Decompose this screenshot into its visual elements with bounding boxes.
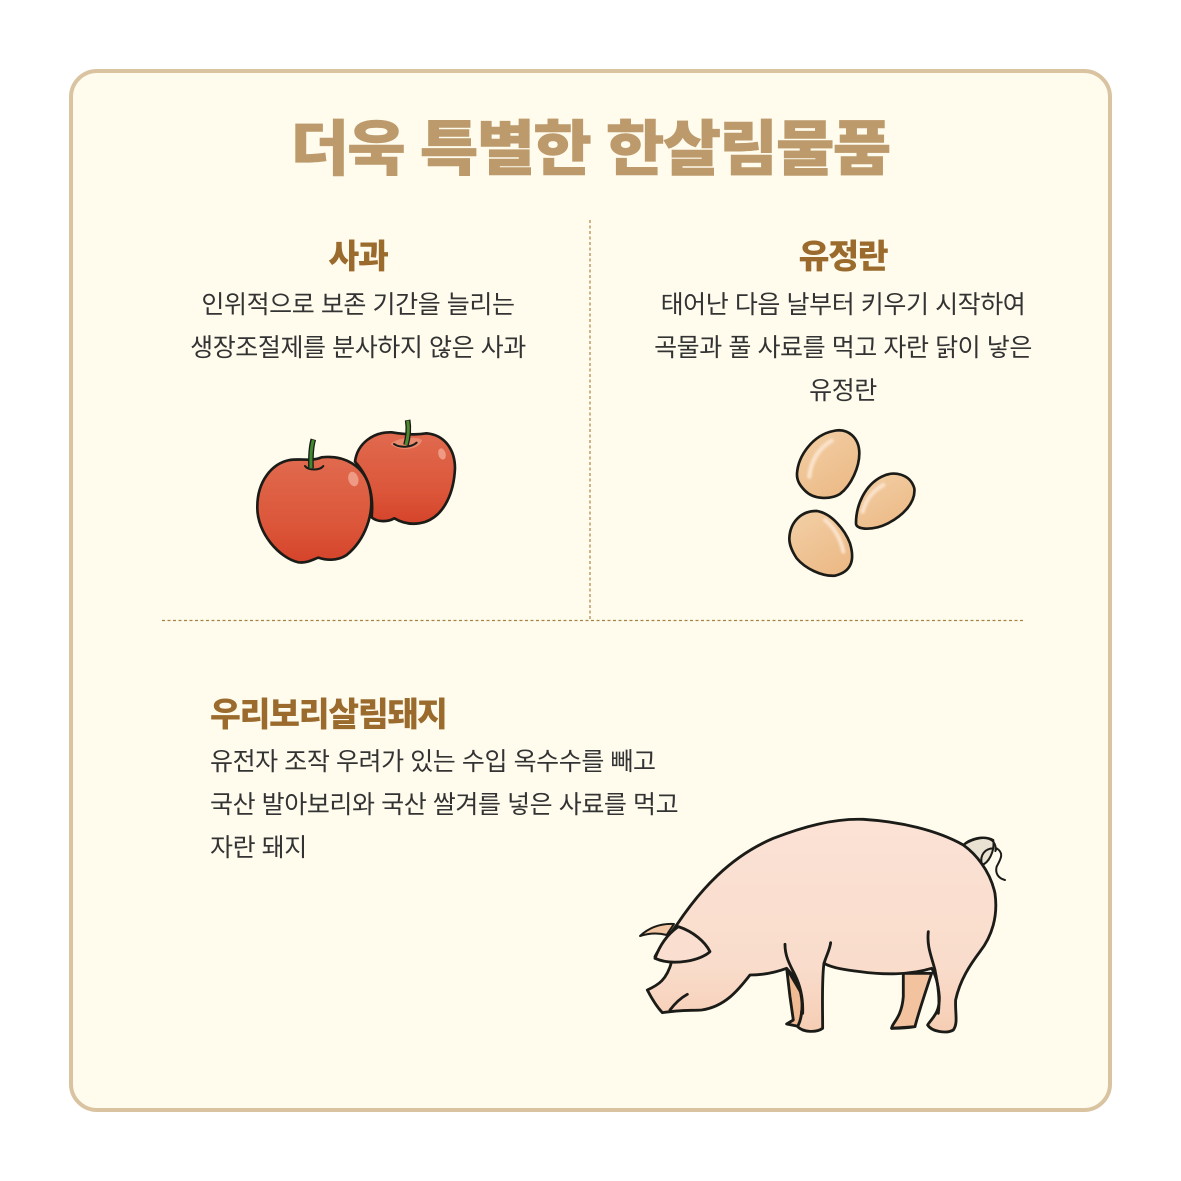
heading: apple: 사과 xyxy=(328,239,388,276)
text: apple xyxy=(190,291,526,362)
panel: card xyxy=(69,69,1112,1112)
text: pork: 자란 돼지 xyxy=(210,834,307,862)
heading: pork: 우리보리살림돼지 xyxy=(210,697,447,734)
text: apple: 인위적으로 보존 기간을 늘리는 xyxy=(201,291,515,319)
title: 더욱 특별한 한살림물품 xyxy=(291,116,889,183)
text: egg: 태어난 다음 날부터 키우기 시작하여 xyxy=(661,291,1025,319)
text: pork xyxy=(210,748,678,862)
text: egg: 유정란 xyxy=(809,377,877,405)
text: apple: 생장조절제를 분사하지 않은 사과 xyxy=(190,334,526,362)
icon: eggs xyxy=(789,430,914,576)
text: pork: 국산 발아보리와 국산 쌀겨를 넣은 사료를 먹고 xyxy=(210,791,678,819)
text: egg: 곡물과 풀 사료를 먹고 자란 닭이 낳은 xyxy=(654,334,1032,362)
text: pork: 유전자 조작 우려가 있는 수입 옥수수를 빼고 xyxy=(210,748,656,776)
icon: pig xyxy=(640,819,1005,1032)
text: egg xyxy=(654,291,1032,405)
heading: egg: 유정란 xyxy=(799,239,887,276)
